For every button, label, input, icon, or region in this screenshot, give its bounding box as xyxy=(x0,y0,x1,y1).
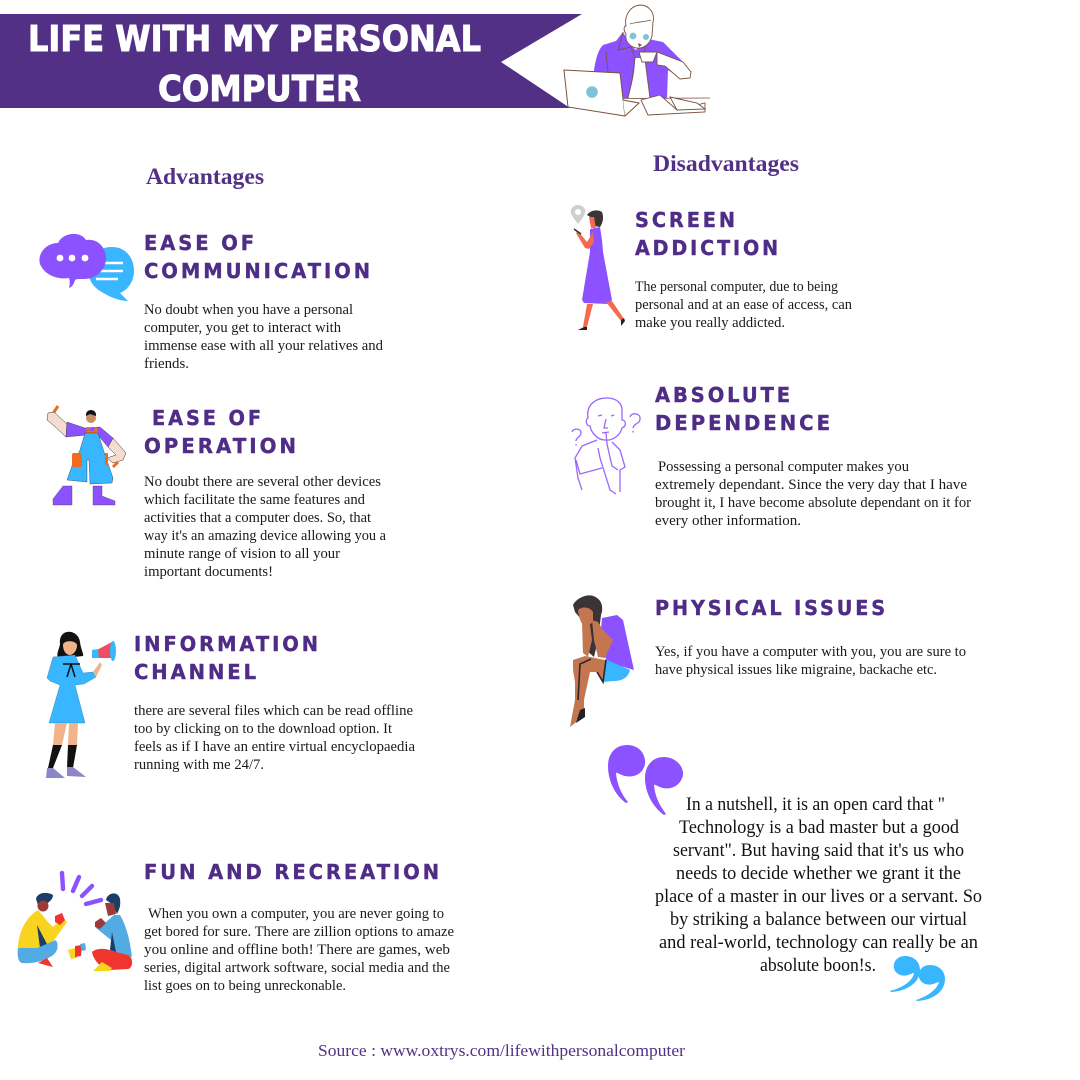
text block: friends. xyxy=(144,356,189,372)
icon: thinking man xyxy=(572,398,640,494)
text block: needs to decide whether we grant it the xyxy=(676,864,961,884)
text block xyxy=(144,302,383,372)
icon: closing quote mark xyxy=(890,956,945,1001)
heading xyxy=(144,406,299,458)
heading: INFORMATION xyxy=(134,632,321,656)
icon: woman with megaphone xyxy=(46,632,116,778)
heading xyxy=(144,231,373,283)
text block: running with me 24/7. xyxy=(134,757,264,773)
icon: chat bubbles xyxy=(39,234,134,301)
text block: immense ease with all your relatives and xyxy=(144,338,383,354)
heading: ADDICTION xyxy=(635,236,781,260)
text block: and real-world, technology can really be an xyxy=(659,933,978,953)
text block: absolute boon!s. xyxy=(760,956,876,976)
text block: way it's an amazing device allowing you a xyxy=(144,528,387,544)
panel: information channel xyxy=(46,632,416,778)
text block: computer, you get to interact with xyxy=(144,320,341,336)
icon: opening quote mark xyxy=(608,745,683,815)
heading: disadvantages: Disadvantages xyxy=(653,151,799,176)
callout: closing quote xyxy=(608,745,982,1001)
illustration: man with laptop and coffee xyxy=(564,5,710,116)
heading: OPERATION xyxy=(144,434,299,458)
icon: woman holding head xyxy=(570,595,634,727)
heading: EASE OF xyxy=(144,231,257,255)
heading: DEPENDENCE xyxy=(655,411,833,435)
text block: get bored for sure. There are zillion options to amaze xyxy=(144,924,454,940)
text block xyxy=(655,795,982,976)
text block xyxy=(144,474,387,580)
text block: minute range of vision to all your xyxy=(144,546,340,562)
text block xyxy=(635,279,852,331)
panel: fun and recreation xyxy=(18,860,454,994)
heading: FUN AND RECREATION xyxy=(144,860,442,884)
text block: series, digital artwork software, social media and the xyxy=(144,960,450,976)
heading: COMMUNICATION xyxy=(144,259,373,283)
title: LIFE WITH MY PERSONAL xyxy=(28,19,481,60)
heading: advantages: Advantages xyxy=(146,164,264,189)
text block: personal and at an ease of access, can xyxy=(635,297,852,313)
text block: make you really addicted. xyxy=(635,315,785,331)
heading xyxy=(655,383,833,435)
heading: SCREEN xyxy=(635,208,738,232)
icon: woman walking with phone xyxy=(571,205,625,330)
text block: No doubt when you have a personal xyxy=(144,302,353,318)
panel: screen addiction xyxy=(571,205,852,331)
text block: list goes on to being unreckonable. xyxy=(144,978,346,994)
text block: have physical issues like migraine, backache etc. xyxy=(655,662,937,678)
text block xyxy=(655,644,966,678)
heading: ABSOLUTE xyxy=(655,383,793,407)
icon: person in overalls xyxy=(47,406,126,505)
heading xyxy=(635,208,781,260)
text block: brought it, I have become absolute dependant on it for xyxy=(655,495,971,511)
heading xyxy=(134,632,321,684)
heading: EASE OF xyxy=(152,406,264,430)
text block xyxy=(655,459,971,529)
panel: physical issues xyxy=(570,595,966,727)
text block: you online and offline both! There are games, web xyxy=(144,942,450,958)
text block: extremely dependant. Since the very day that I have xyxy=(655,477,967,493)
text block: servant". But having said that it's us who xyxy=(673,841,964,861)
title: COMPUTER xyxy=(158,69,361,110)
panel: absolute dependence xyxy=(572,383,971,529)
source line: Source : www.oxtrys.com/lifewithpersonalcomputer xyxy=(318,1041,685,1060)
panel: ease of operation xyxy=(47,406,387,580)
text block: by striking a balance between our virtual xyxy=(670,910,967,930)
text block xyxy=(144,906,454,994)
text block: No doubt there are several other devices xyxy=(144,474,381,490)
text block: there are several files which can be read offline xyxy=(134,703,413,719)
text block: place of a master in our lives or a servant. So xyxy=(655,887,982,907)
text block: which facilitate the same features and xyxy=(144,492,365,508)
text block: Technology is a bad master but a good xyxy=(679,818,960,838)
text block: Possessing a personal computer makes you xyxy=(658,459,909,475)
text block: important documents! xyxy=(144,564,273,580)
text block: The personal computer, due to being xyxy=(635,279,838,295)
text block: feels as if I have an entire virtual encyclopaedia xyxy=(134,739,416,755)
panel: ease of communication xyxy=(39,231,383,372)
title banner xyxy=(0,14,582,110)
text block: activities that a computer does. So, that xyxy=(144,510,371,526)
icon: two people playing cards xyxy=(18,873,132,971)
text block: In a nutshell, it is an open card that " xyxy=(686,795,945,815)
text block: too by clicking on to the download option. It xyxy=(134,721,392,737)
heading: CHANNEL xyxy=(134,660,259,684)
text block xyxy=(134,703,416,773)
title xyxy=(28,19,481,110)
heading: PHYSICAL ISSUES xyxy=(655,596,888,620)
text block: every other information. xyxy=(655,513,801,529)
text block: Yes, if you have a computer with you, you are sure to xyxy=(655,644,966,660)
text block: When you own a computer, you are never going to xyxy=(148,906,444,922)
